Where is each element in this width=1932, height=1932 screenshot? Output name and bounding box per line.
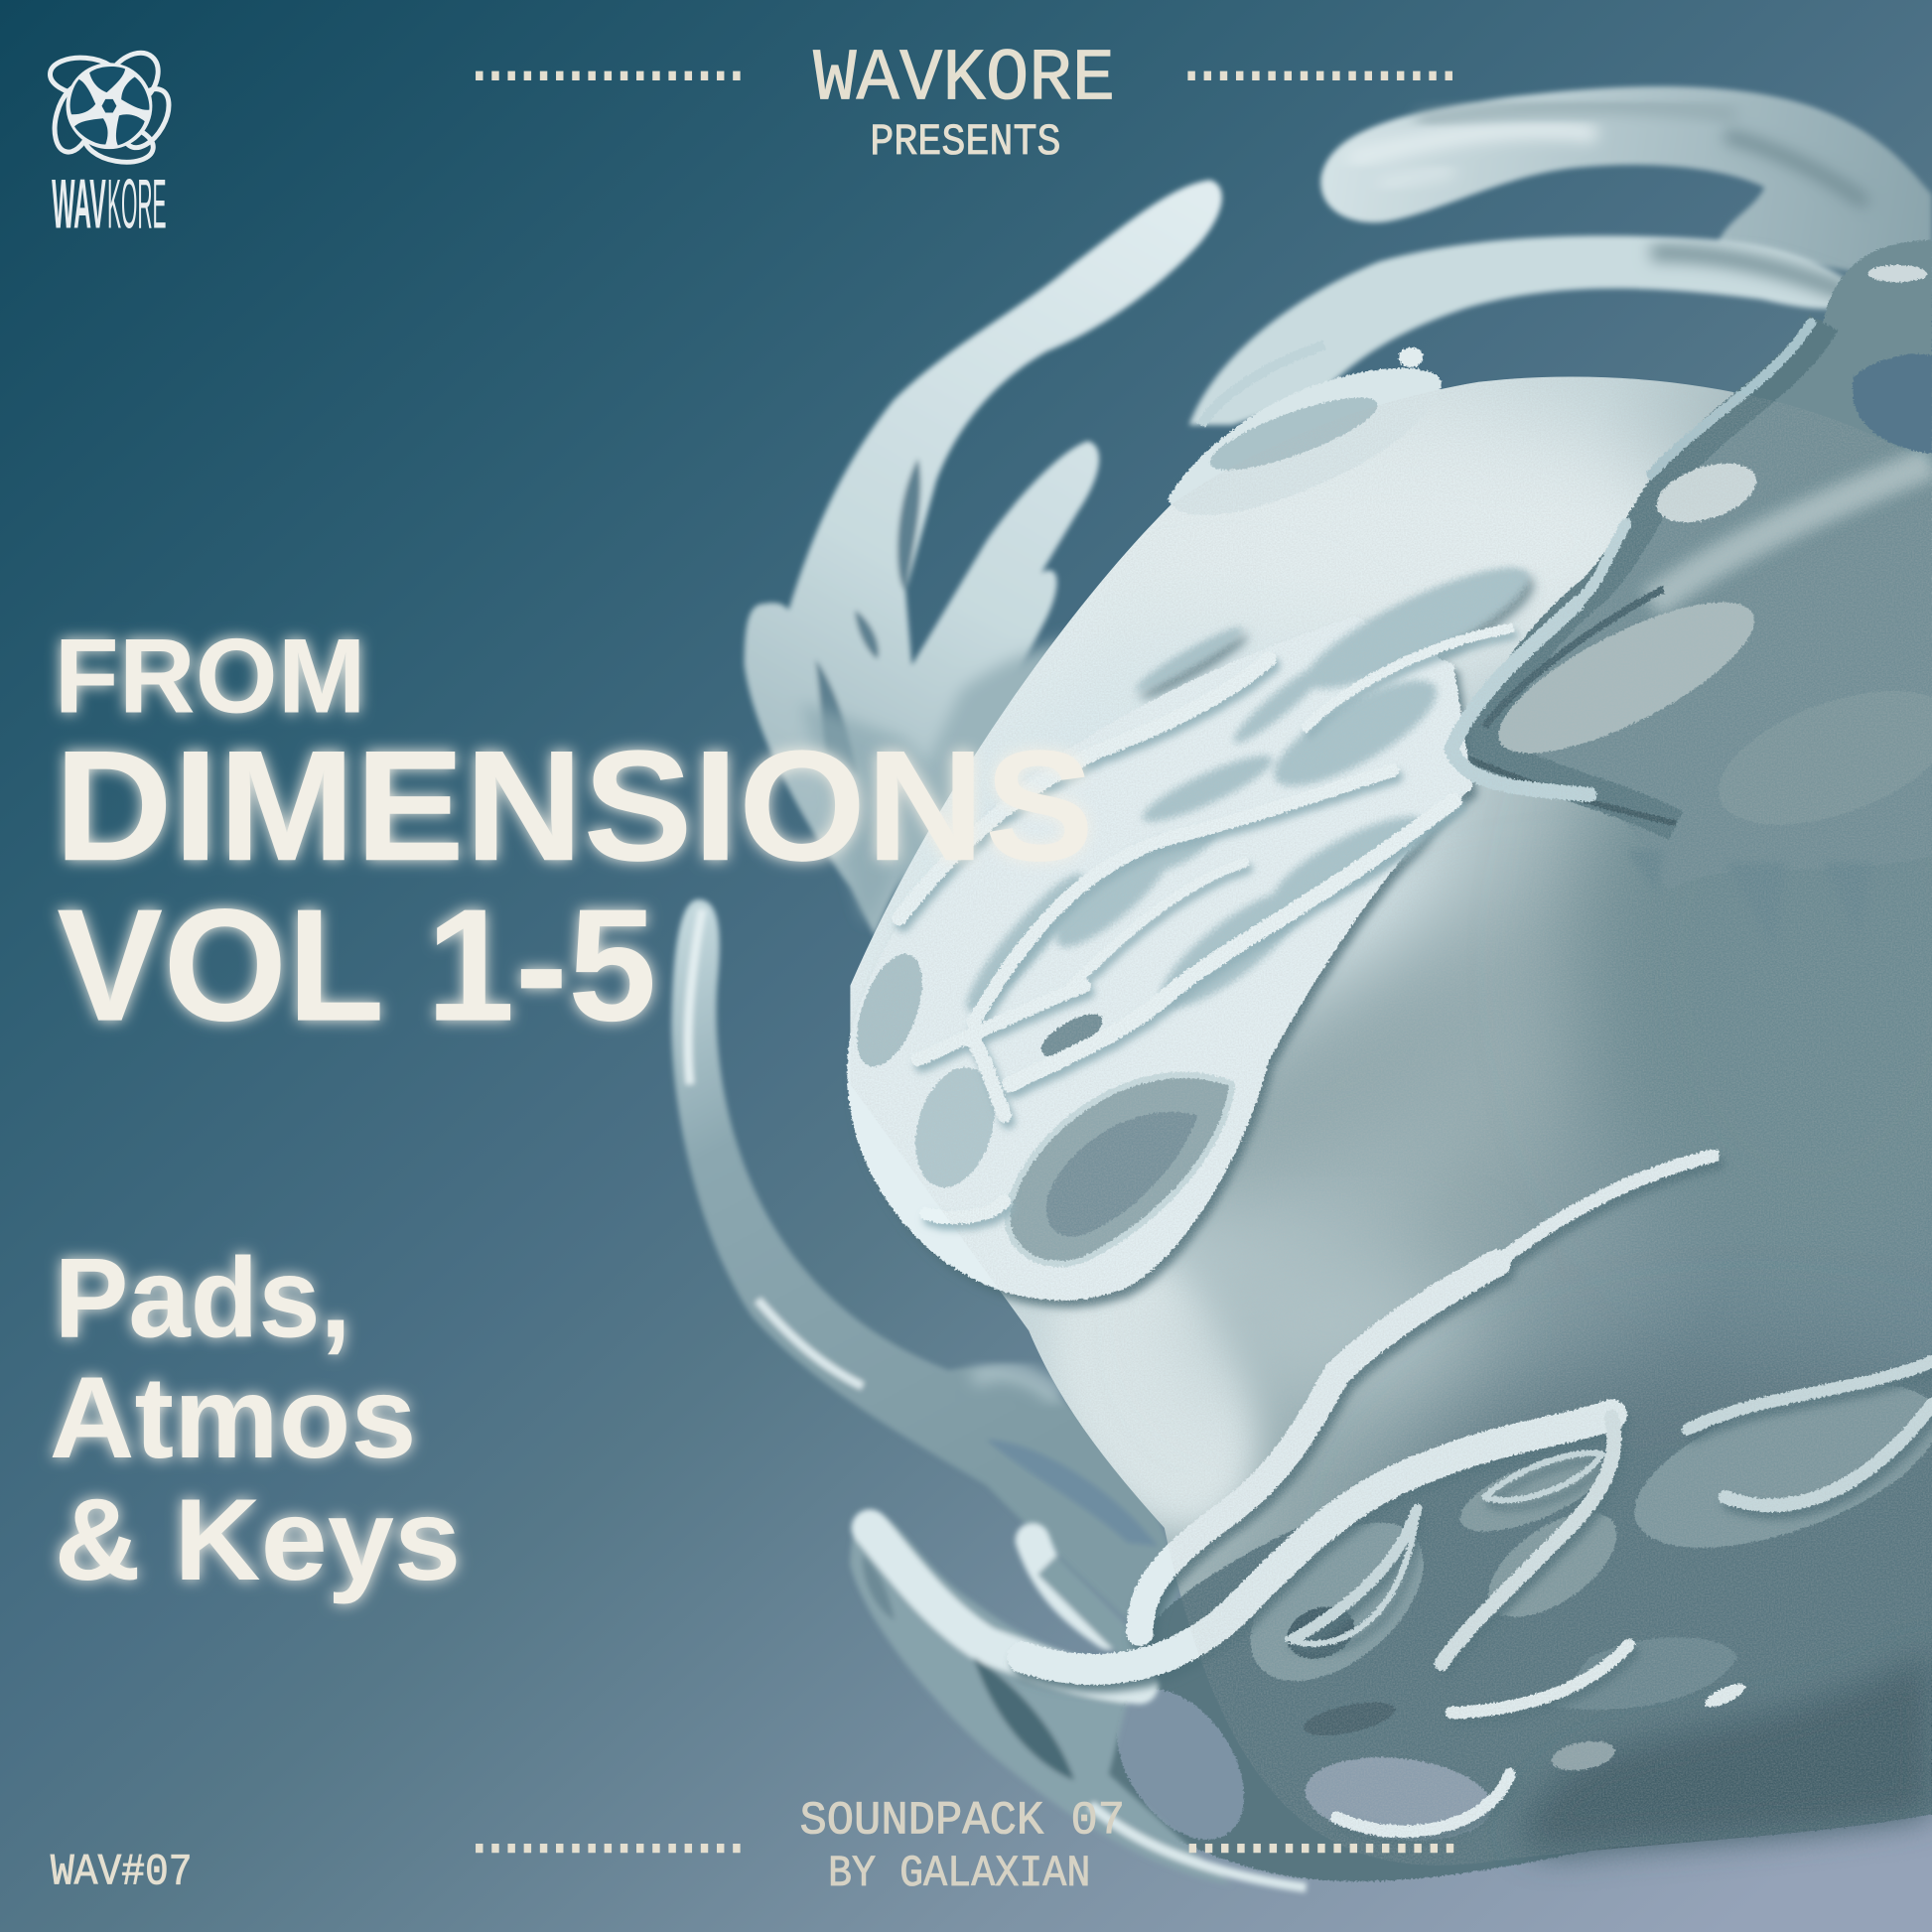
subtitle: & Keys bbox=[55, 1474, 461, 1604]
large ring hole bbox=[1008, 1075, 1232, 1264]
far tendril: top arc bbox=[1320, 86, 1932, 296]
dark mesh lattice lower right bbox=[1023, 1351, 1932, 1881]
catalogue number: WAV#07 bbox=[51, 1849, 193, 1898]
logo: reel emblem with wordmark bbox=[48, 43, 178, 243]
bottom left loop bbox=[850, 1512, 1307, 1887]
far tendril: long lower left tail with branches bbox=[671, 899, 1182, 1651]
header dotted rule right bbox=[1187, 72, 1455, 79]
main title: FROM bbox=[55, 616, 366, 735]
text: KORE bbox=[107, 165, 167, 243]
footer credit: BY GALAXIAN bbox=[828, 1850, 1090, 1899]
white lower rim strands bbox=[1023, 1156, 1932, 1832]
header dotted rule left bbox=[476, 72, 741, 79]
subtitle: Atmos bbox=[50, 1352, 416, 1482]
drips from upper lattice bbox=[1626, 850, 1872, 949]
surface grain bbox=[850, 379, 1932, 1865]
small holes bbox=[902, 1058, 1008, 1196]
footer credit bbox=[799, 1796, 1125, 1899]
white mesh body upper left with holes bbox=[844, 548, 1541, 1301]
holes through lattice bbox=[1302, 1748, 1496, 1850]
main title bbox=[55, 616, 1094, 1055]
header: brand title: PRESENTS bbox=[870, 118, 1061, 168]
footer dotted rule right bbox=[1189, 1845, 1455, 1852]
mesh silhouette bbox=[847, 617, 1472, 1301]
footer dotted rule left bbox=[476, 1845, 742, 1852]
wordmark: WAV bbox=[52, 165, 106, 243]
raised white strands across mesh bbox=[899, 628, 1509, 1217]
footer credit: SOUNDPACK 07 bbox=[799, 1796, 1125, 1849]
main title: DIMENSIONS bbox=[55, 717, 1094, 894]
header: brand title: WAVKORE bbox=[813, 38, 1115, 121]
top ring oval on sphere bbox=[1169, 345, 1442, 515]
header: brand title bbox=[813, 38, 1115, 168]
dark upper right lattice bbox=[1457, 240, 1932, 890]
main title: VOL 1-5 bbox=[57, 877, 656, 1055]
illustration: abstract white organic sphere sculpture bbox=[665, 73, 1932, 1910]
subtitle bbox=[50, 1236, 461, 1604]
icon: five-petal reel bbox=[48, 43, 178, 167]
main sphere body bbox=[850, 377, 1932, 1851]
far tendril: left branch and fingers bbox=[745, 180, 1222, 936]
strand highlights on upper lattice bbox=[1451, 323, 1811, 794]
dents between strands bbox=[954, 548, 1541, 1025]
far tendril: second arc over sphere bbox=[1189, 236, 1872, 425]
subtitle: Pads, bbox=[55, 1236, 351, 1362]
